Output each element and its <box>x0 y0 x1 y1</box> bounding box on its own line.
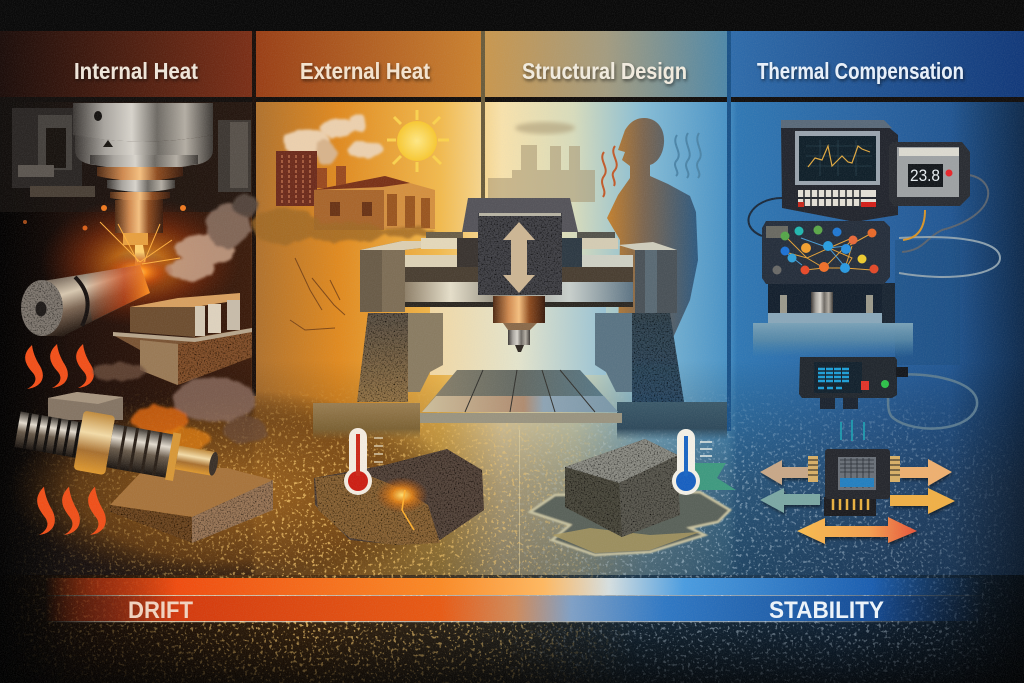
head side collars <box>457 238 478 267</box>
illustration: person silhouette <box>607 118 698 340</box>
illustration: workpiece cylinder <box>21 265 150 336</box>
panel: internal heat backdrop <box>0 102 252 327</box>
right end block <box>635 250 677 313</box>
icon: cold thermometer <box>672 429 712 495</box>
speckled dust floor <box>0 380 1024 683</box>
header: External Heat <box>256 31 481 97</box>
steel crossbeam <box>405 282 633 302</box>
icon: teal downward signal lines <box>841 420 864 441</box>
illustration: machine tower behind control panel <box>753 240 960 365</box>
panel: sensor network board <box>762 221 890 284</box>
left end block <box>360 241 421 312</box>
illustration: stone block behind screw <box>48 392 123 420</box>
illustration: ball screw <box>12 400 223 494</box>
illustration: steel plate <box>110 468 273 543</box>
label: drift: DRIFT <box>128 597 193 624</box>
header: Thermal Compensation: Thermal Compensation <box>757 58 964 84</box>
head block <box>478 213 562 295</box>
icon: warm and cool air waves <box>602 133 701 197</box>
beam rails top <box>426 232 463 238</box>
illustration: machine frame behind spindle <box>12 108 251 197</box>
illustration: stepped clamp blocks <box>113 293 252 385</box>
panel: temperature readout <box>889 142 970 206</box>
machine base left <box>313 403 420 440</box>
illustration: factory building <box>314 166 435 230</box>
panel: small controller device <box>799 357 977 429</box>
icon: hot thermometer <box>344 428 383 495</box>
illustration: cables <box>748 175 1000 277</box>
header: Internal Heat: Internal Heat <box>74 58 198 84</box>
right column <box>632 313 684 402</box>
icon: upper heat flames <box>25 344 94 389</box>
panel dividers <box>0 31 1024 575</box>
illustration: puddle <box>530 492 730 555</box>
ground glow across internal and external heat panels <box>10 390 460 590</box>
left column frame <box>408 313 443 392</box>
illustration: city silhouette <box>488 122 595 202</box>
work table <box>422 370 618 412</box>
illustration: cool stone block <box>565 439 680 537</box>
header: External Heat: External Heat <box>300 58 430 84</box>
machine base right <box>617 402 727 440</box>
legend bar: drift to stability <box>45 578 985 624</box>
label: stability: STABILITY <box>769 597 884 624</box>
spindle <box>493 296 545 323</box>
illustration: spindle head <box>73 103 213 268</box>
icon: wide gradient arrow <box>797 517 917 544</box>
screen bezel <box>795 131 880 185</box>
double arrow <box>503 222 535 293</box>
illustration: smoke clouds <box>282 113 382 165</box>
header: Structural Design <box>485 31 727 97</box>
illustration: smoke <box>166 193 257 281</box>
head hood <box>462 198 578 232</box>
right column frame <box>595 313 632 392</box>
illustration: central gantry machine <box>313 198 727 440</box>
left column <box>357 313 408 402</box>
icon: left arrows <box>760 460 820 513</box>
line chart <box>799 136 876 181</box>
machine opening background <box>430 305 606 375</box>
icon: green flag behind thermometer <box>692 463 736 490</box>
icon: sun <box>387 110 449 172</box>
panel: controller monitor <box>781 120 898 222</box>
icon: microchip <box>808 449 900 516</box>
illustration: red brick tower <box>276 151 317 206</box>
illustration: cutting glow and sparks <box>23 205 186 292</box>
illustration: ground cracks <box>290 258 345 330</box>
icon: lower heat flames <box>37 487 106 535</box>
illustration: dusty treeline <box>251 208 436 244</box>
icon: right arrows <box>890 459 955 514</box>
illustration: lower smoke and sparks <box>94 363 267 452</box>
keypad <box>798 190 876 207</box>
header: Internal Heat <box>0 31 252 97</box>
illustration: hot cracked rock <box>314 449 484 545</box>
header: Structural Design: Structural Design <box>522 58 687 84</box>
header: Thermal Compensation <box>731 31 1024 97</box>
panel: temperature readout: 23.8 <box>910 166 940 185</box>
